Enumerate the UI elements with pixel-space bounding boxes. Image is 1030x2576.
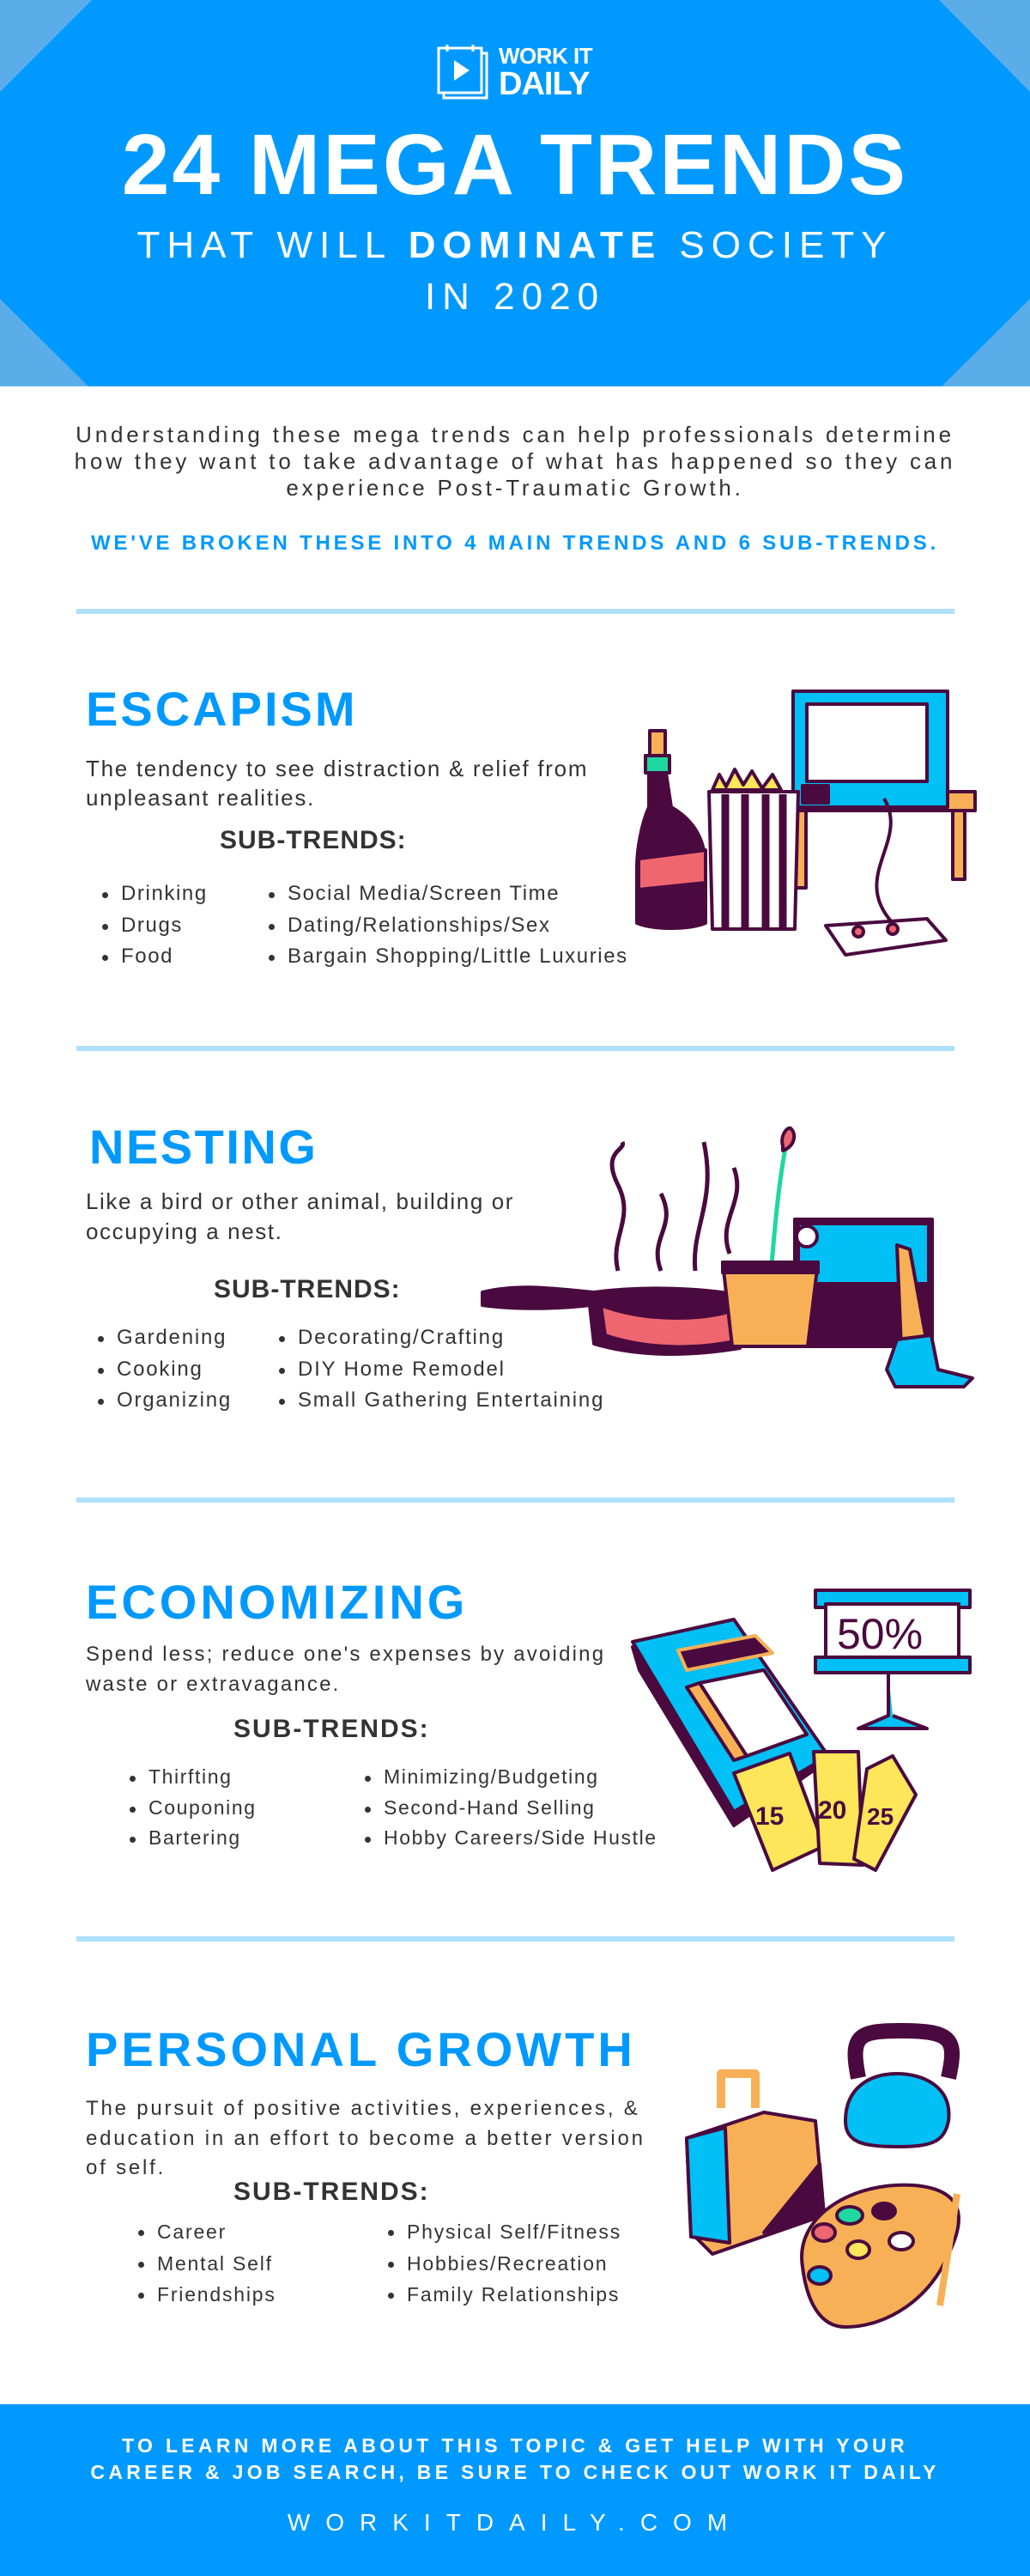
panel: escapism: Social Media/Screen Time (288, 882, 560, 905)
description: of self. (86, 2156, 166, 2179)
panel: economizing: Minimizing/Budgeting (384, 1765, 599, 1788)
description: Spend less; reduce one's expenses by avoiding (86, 1643, 605, 1666)
description (86, 756, 588, 811)
panel: nesting (86, 1120, 604, 1412)
sub-trends list: Mental Self (157, 2251, 273, 2274)
sub-trends list: Cooking (117, 1357, 203, 1381)
intro text (75, 422, 955, 501)
description: education in an effort to become a better version (86, 2126, 645, 2150)
footer (0, 2404, 1030, 2576)
title: 24 MEGA TRENDS (122, 117, 908, 213)
subtitle: IN 2020 (425, 276, 605, 318)
panel: nesting: Decorating/Crafting (298, 1326, 505, 1349)
description: occupying a nest. (86, 1218, 283, 1244)
sub-trends list: Organizing (117, 1388, 232, 1412)
heading: economizing: ECONOMIZING (86, 1575, 468, 1629)
sub-trends list: Career (157, 2221, 227, 2243)
footer call to action (90, 2434, 940, 2483)
illustration: pan, plant, pot, brush (481, 1127, 974, 1388)
logo: WORK IT (499, 43, 592, 69)
footer call to action: TO LEARN MORE ABOUT THIS TOPIC & GET HELP WITH YOUR (122, 2434, 908, 2457)
description: The tendency to see distraction & relief from (86, 756, 588, 781)
sub-trends list: Gardening (117, 1326, 227, 1349)
illustration: calculator, sign, coupons: 50% (837, 1610, 923, 1658)
intro highlight: WE'VE BROKEN THESE INTO 4 MAIN TRENDS AND 6 SUB-TRENDS. (91, 532, 939, 555)
illustration: briefcase, kettlebell, palette (685, 2023, 960, 2329)
sub-trends list: Bartering (148, 1826, 241, 1849)
subtitle (136, 224, 894, 318)
sub-trends list: Couponing (148, 1796, 257, 1819)
description (86, 1643, 605, 1696)
illustration: calculator, sign, coupons (630, 1589, 972, 1872)
intro text: experience Post-Traumatic Growth. (286, 475, 744, 501)
footer url: WORKITDAILY.COM (288, 2509, 742, 2536)
subtitle: THAT WILL DOMINATE SOCIETY (136, 224, 894, 266)
header banner (0, 0, 1030, 386)
sub-trends list: Friendships (157, 2283, 276, 2306)
panel: personal growth: Family Relationships (407, 2283, 620, 2306)
sub-trends heading: SUB-TRENDS: (214, 1275, 401, 1303)
panel: personal growth: Physical Self/Fitness (407, 2221, 621, 2243)
sub-trends heading: SUB-TRENDS: (220, 826, 407, 854)
panel: nesting: Small Gathering Entertaining (298, 1388, 604, 1412)
sub-trends list (138, 2221, 276, 2306)
footer call to action: CAREER & JOB SEARCH, BE SURE TO CHECK OUT WORK IT DAILY (90, 2461, 940, 2483)
sub-trends heading: SUB-TRENDS: (233, 1715, 430, 1743)
description: The pursuit of positive activities, experiences, & (86, 2097, 640, 2120)
heading: personal growth: PERSONAL GROWTH (86, 2022, 636, 2076)
illustration: calculator, sign, coupons: 25 (867, 1803, 894, 1830)
panel: nesting: DIY Home Remodel (298, 1357, 506, 1381)
illustration: calculator, sign, coupons: 20 (818, 1796, 846, 1825)
illustration: wine, popcorn, tv, controller (635, 690, 977, 957)
description: unpleasant realities. (86, 785, 315, 811)
panel: personal growth: Hobbies/Recreation (407, 2251, 608, 2274)
description (86, 1188, 514, 1244)
sub-trends list: Drugs (121, 914, 183, 936)
sub-trends heading: SUB-TRENDS: (233, 2178, 430, 2206)
panel: escapism: Dating/Relationships/Sex (288, 914, 551, 936)
panel: escapism (86, 682, 628, 968)
sub-trends list: Food (121, 945, 173, 968)
logo (438, 43, 592, 102)
sub-trends list: Drinking (121, 882, 208, 905)
intro text: Understanding these mega trends can help professionals determine (76, 422, 954, 447)
sub-trends list (102, 882, 208, 968)
panel: escapism: Bargain Shopping/Little Luxuries (288, 945, 628, 968)
logo: DAILY (499, 66, 590, 102)
heading: escapism: ESCAPISM (86, 682, 357, 736)
panel: economizing: Second-Hand Selling (384, 1796, 596, 1819)
panel: economizing: Hobby Careers/Side Hustle (384, 1826, 657, 1849)
sub-trends list (98, 1326, 232, 1412)
panel: personal growth (86, 2022, 645, 2306)
sub-trends list: Thirfting (148, 1765, 232, 1788)
panel: economizing (86, 1575, 657, 1849)
description: waste or extravagance. (86, 1673, 341, 1696)
intro text: how they want to take advantage of what has happened so they can (75, 448, 955, 474)
sub-trends list (130, 1765, 257, 1849)
description: Like a bird or other animal, building or (86, 1188, 514, 1214)
illustration: calculator, sign, coupons: 15 (755, 1802, 784, 1831)
corner triangles (0, 0, 1030, 386)
heading: nesting: NESTING (89, 1120, 318, 1174)
description (86, 2097, 645, 2179)
